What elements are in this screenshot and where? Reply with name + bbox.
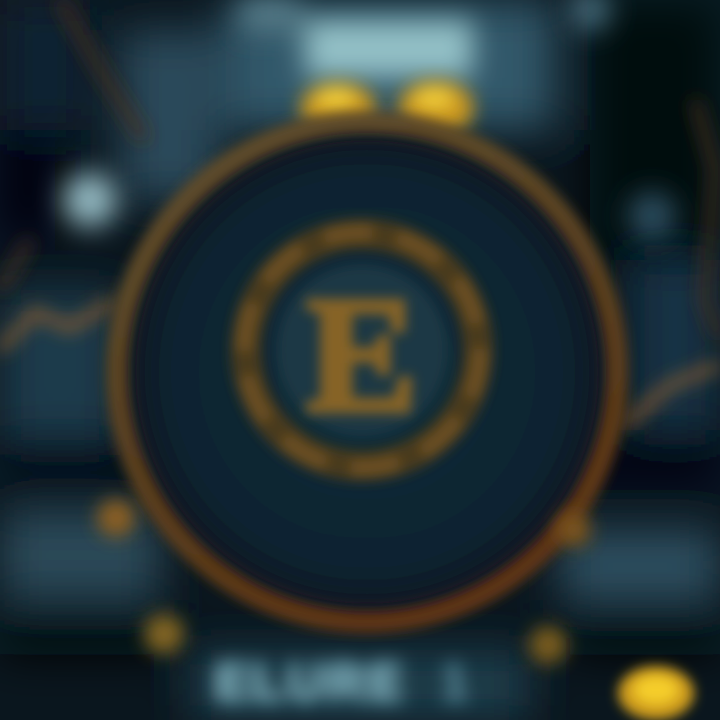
coin inner ring — [244, 232, 480, 468]
letter E: E — [307, 263, 417, 446]
top light panel — [240, 0, 473, 78]
gold coin bottom right — [618, 666, 694, 720]
gold nuggets on top of coin — [300, 80, 474, 136]
blurred bottom caption: 1 — [440, 654, 469, 712]
coin — [117, 122, 617, 622]
small gold glows — [97, 499, 591, 664]
glowing orbs on the sides — [63, 0, 676, 240]
coin face — [135, 140, 599, 604]
copper circuit lines — [0, 0, 720, 425]
coin rim — [117, 122, 617, 622]
blurred bottom caption: ELURE — [214, 654, 406, 712]
